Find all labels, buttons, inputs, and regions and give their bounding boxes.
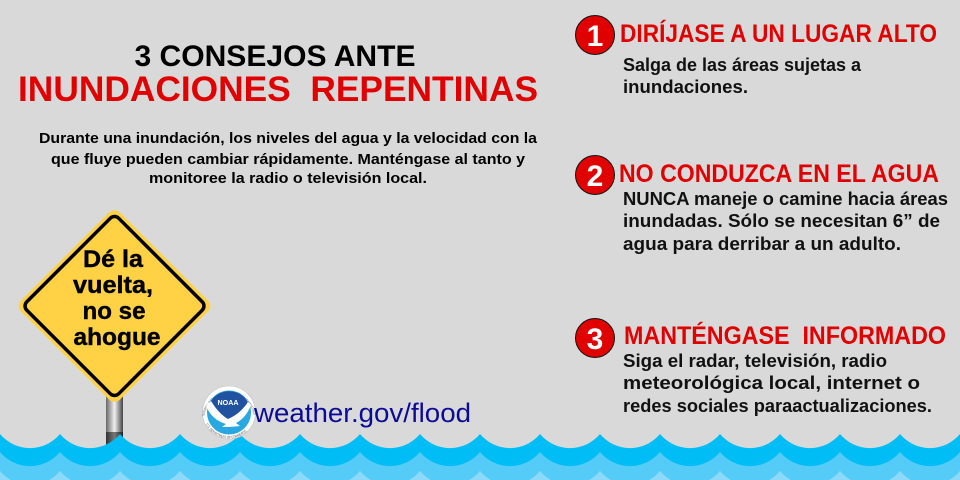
icon: NOAA logo: U.S. DEPARTMENT OF COMMERCE [206,423,246,438]
intro text: monitoree la radio o televisión local. [149,170,427,187]
icon: NOAA logo [202,386,256,440]
warning sign: ahogue [74,324,160,351]
warning sign: no se [82,298,146,325]
icon: NOAA logo: NATIONAL OCEANIC AND ATMOSPHERIC ADMINISTRATION [202,396,256,416]
title: 3 CONSEJOS ANTE [134,40,416,73]
tip 1 [576,16,937,97]
tip 2 number badge [576,156,614,194]
tip 1 body: Salga de las áreas sujetas a [623,55,862,75]
tip 2 body [623,189,948,254]
tip 1 body: inundaciones. [623,77,748,97]
tip 3 body: Siga el radar, televisión, radio [623,351,887,371]
tip 3 body: redes sociales paraactualizaciones. [623,396,932,416]
warning sign: vuelta, [73,272,153,299]
tip 1 number badge [576,16,614,54]
sign post [106,396,123,448]
tip 1 number badge: 1 [587,20,603,53]
title: INUNDACIONES REPENTINAS [18,70,538,109]
tip 3 [576,318,946,416]
tip 1 heading: DIRÍJASE A UN LUGAR ALTO [620,19,937,48]
tip 2 heading: NO CONDUZCA EN EL AGUA [619,160,939,188]
intro text [39,130,538,187]
intro text: que fluye pueden cambiar rápidamente. Manténgase al tanto y [51,151,526,168]
tip 2 body: agua para derribar a un adulto. [623,234,901,254]
icon: NOAA logo: NOAA [218,400,238,407]
tip 3 heading: MANTÉNGASE INFORMADO [624,321,946,350]
tip 2 [576,156,948,254]
warning sign: Dé la [83,246,144,273]
tip 2 number badge: 2 [587,160,603,193]
tip 3 body [623,351,932,416]
tip 1 body [623,55,862,97]
intro text: Durante una inundación, los niveles del agua y la velocidad con la [39,130,538,147]
waves [0,434,960,480]
tip 2 body: inundadas. Sólo se necesitan 6” de [623,211,940,231]
website link: weather.gov/flood [253,398,471,428]
title [18,40,538,109]
tip 2 body: NUNCA maneje o camine hacia áreas [623,189,948,209]
tip 3 number badge [576,318,614,358]
tip 3 body: meteorológica local, internet o [623,373,920,393]
warning sign [16,207,213,405]
tip 3 number badge: 3 [587,323,603,356]
